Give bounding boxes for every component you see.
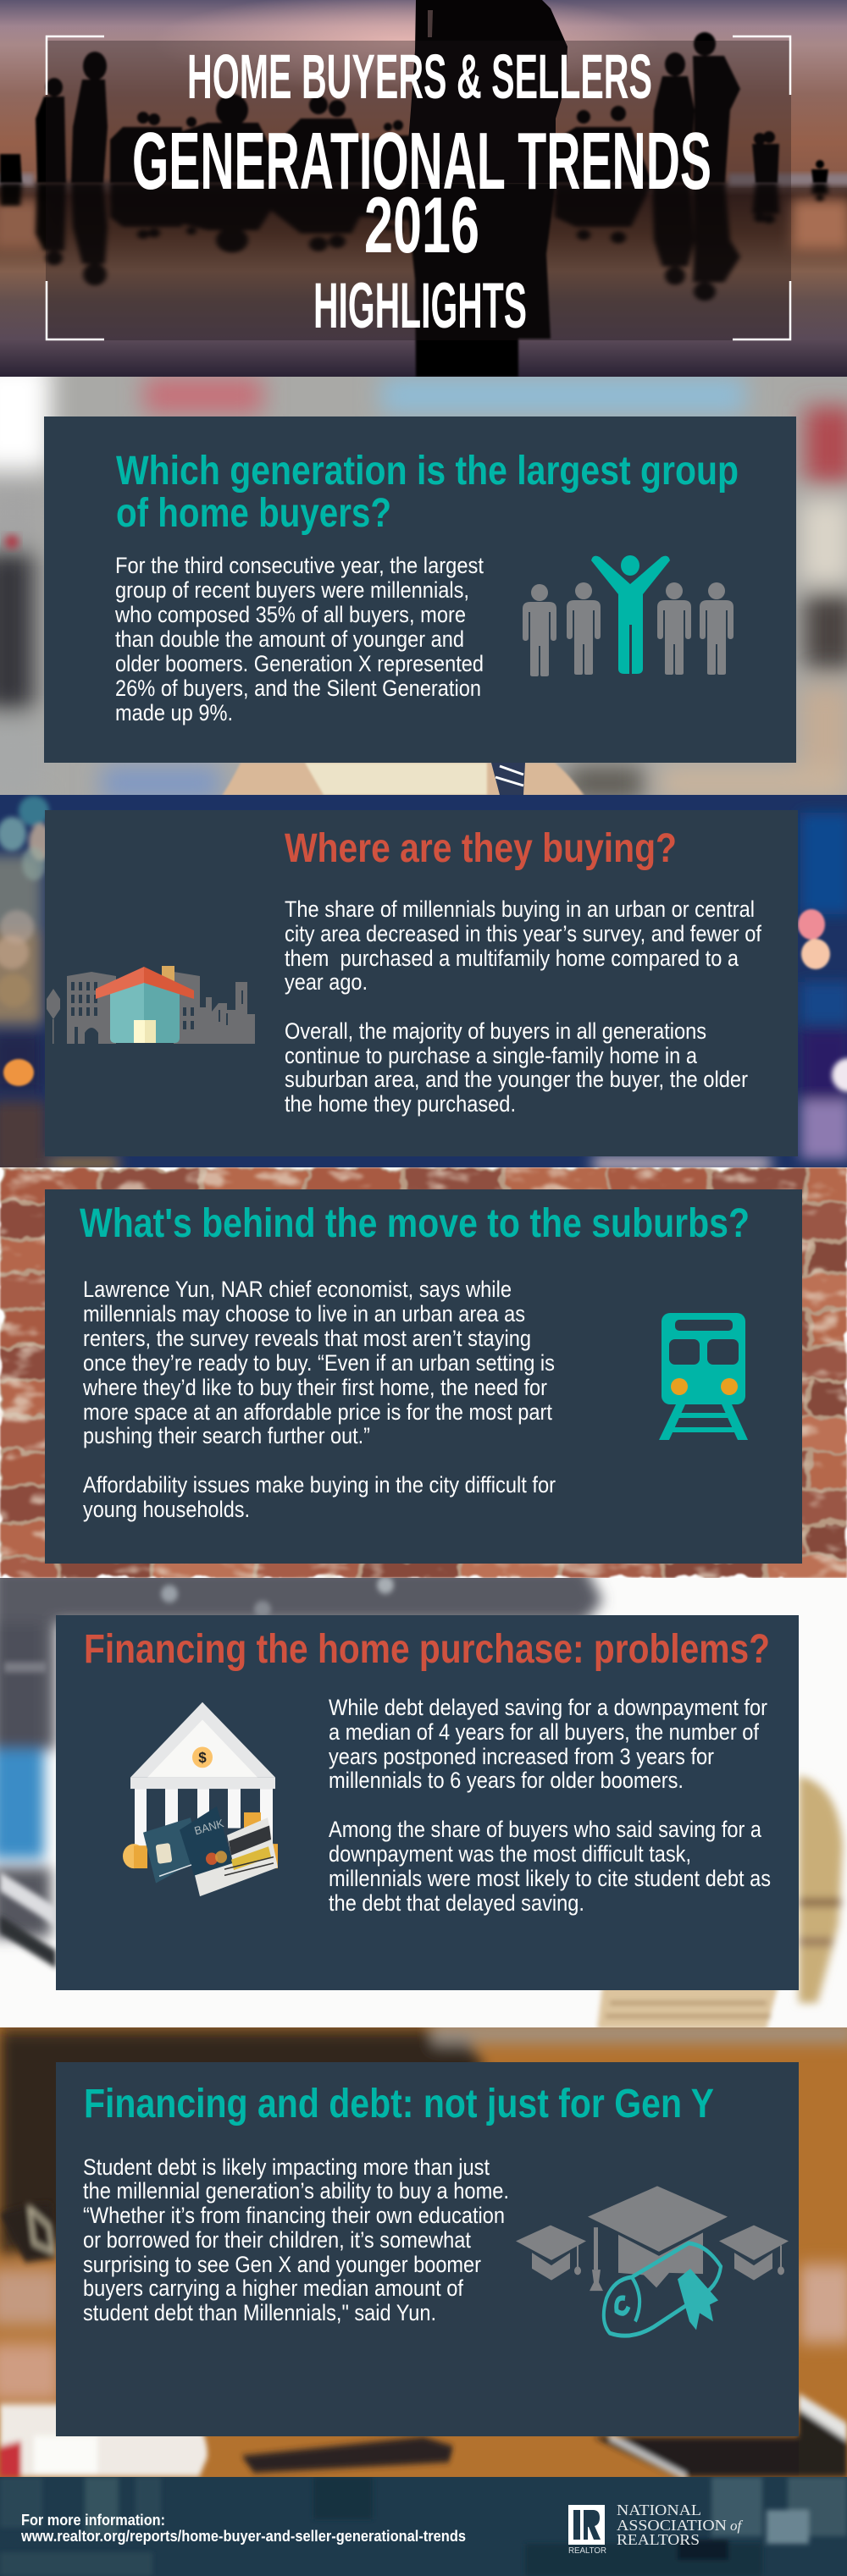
icon: bank and credit cards: $ (198, 1749, 207, 1766)
panel: debt section background (0, 2023, 847, 2477)
panel: financing card (56, 1615, 799, 1990)
body text: “Whether it’s from financing their own education (83, 2203, 505, 2228)
body text: suburban area, and the younger the buyer, the older (285, 1067, 748, 1092)
panel: largest group section background (0, 360, 847, 800)
panel: hero header (0, 0, 847, 377)
heading: which generation: Which generation is the largest group (116, 449, 739, 494)
body text: or borrowed for their children, it’s somewhat (83, 2227, 471, 2253)
body text: downpayment was the most difficult task, (329, 1841, 691, 1867)
logo: National Association of Realtors: ASSOCIATION (617, 2517, 727, 2534)
body text: years postponed increased from 3 years for (329, 1744, 714, 1769)
body text: once they’re ready to buy. “Even if an urban setting is (83, 1350, 555, 1376)
body text (82, 1277, 556, 1522)
logo: National Association of Realtors: REALTORS (617, 2531, 700, 2548)
logo: National Association of Realtors: REALTOR (568, 2546, 606, 2556)
body text: Lawrence Yun, NAR chief economist, says while (83, 1277, 512, 1302)
icon: house in city (47, 966, 255, 1044)
body text: The share of millennials buying in an urban or central (285, 896, 755, 922)
body text (114, 553, 484, 725)
body text: where they’d like to buy their first home, the need for (82, 1375, 547, 1400)
panel: where buying section background (0, 795, 847, 1177)
body text: them purchased a multifamily home compared to a (285, 946, 739, 971)
body text: group of recent buyers were millennials, (115, 577, 469, 603)
body text (329, 1695, 771, 1916)
hero background sunset photo (0, 0, 847, 377)
body text: surprising to see Gen X and younger boomer (83, 2252, 481, 2277)
body text: made up 9%. (115, 700, 233, 725)
footer text (20, 2512, 466, 2545)
heading: financing and debt: Financing and debt: not just for Gen Y (84, 2082, 714, 2126)
icon: train (659, 1313, 748, 1440)
body text: Student debt is likely impacting more than just (83, 2154, 490, 2180)
footer text: For more information: (21, 2512, 165, 2529)
body text: who composed 35% of all buyers, more (114, 602, 466, 627)
panel: debt card (56, 2062, 799, 2436)
body text: the debt that delayed saving. (329, 1890, 584, 1916)
body text: young households. (83, 1497, 250, 1522)
body text: pushing their search further out.” (83, 1423, 370, 1448)
body text: older boomers. Generation X represented (115, 651, 484, 676)
body text: a median of 4 years for all buyers, the number of (329, 1719, 759, 1745)
body text: than double the amount of younger and (115, 626, 464, 652)
body text: the home they purchased. (285, 1091, 516, 1117)
heading line two: of home buyers? (116, 491, 391, 536)
panel: largest group card (44, 416, 796, 763)
body text: While debt delayed saving for a downpayment for (329, 1695, 767, 1720)
body text (83, 2154, 509, 2325)
body text: millennials may choose to live in an urban area as (83, 1301, 525, 1327)
title: year: 2016 (364, 180, 479, 269)
body text (285, 896, 761, 1117)
panel: suburbs section background (0, 1167, 847, 1578)
silhouettes of people and reflections (0, 0, 828, 377)
body text: buyers carrying a higher median amount of (83, 2275, 463, 2301)
corner frame brackets (47, 36, 790, 339)
panel: suburbs card (45, 1189, 802, 1564)
body text: renters, the survey reveals that most aren’t staying (83, 1326, 531, 1351)
logo: National Association of Realtors: of (730, 2518, 744, 2534)
panel: financing section background (0, 1566, 847, 2029)
body text: Among the share of buyers who said saving for a (329, 1817, 762, 1842)
body text: continue to purchase a single-family home in a (285, 1043, 698, 1068)
panel: where buying card (45, 810, 798, 1156)
body text: millennials were most likely to cite student debt as (329, 1866, 771, 1891)
heading: what's behind the move: What's behind the move to the suburbs? (80, 1201, 750, 1246)
body text: city area decreased in this year’s survey, and fewer of (285, 921, 761, 946)
body text: Affordability issues make buying in the city difficult for (83, 1472, 556, 1498)
icon: people with one raised figure (523, 555, 734, 676)
logo: National Association of Realtors: NATIONAL (617, 2502, 701, 2518)
logo: National Association of Realtors (568, 2505, 744, 2553)
title: highlights: HIGHLIGHTS (313, 270, 527, 342)
body text: year ago. (285, 969, 368, 995)
body text: 26% of buyers, and the Silent Generation (115, 676, 481, 701)
body text: more space at an affordable price is for the most part (83, 1399, 552, 1425)
footer city background (0, 2477, 847, 2576)
body text: millennials to 6 years for older boomers. (329, 1768, 684, 1793)
translucent title box (46, 41, 791, 340)
icon: graduation caps and diploma (516, 2186, 789, 2336)
body text: For the third consecutive year, the largest (115, 553, 484, 578)
icon: bank and credit cards: BANK (193, 1817, 225, 1838)
icon: bank and credit cards (123, 1702, 278, 1896)
body text: the millennial generation’s ability to buy a home. (83, 2178, 509, 2204)
body text: student debt than Millennials," said Yun. (83, 2300, 436, 2325)
footer text: www.realtor.org/reports/home-buyer-and-seller-generational-trends (20, 2528, 466, 2545)
panel: footer (0, 2477, 847, 2576)
body text: Overall, the majority of buyers in all generations (285, 1018, 706, 1044)
heading: where are they buying: Where are they buying? (285, 826, 677, 871)
